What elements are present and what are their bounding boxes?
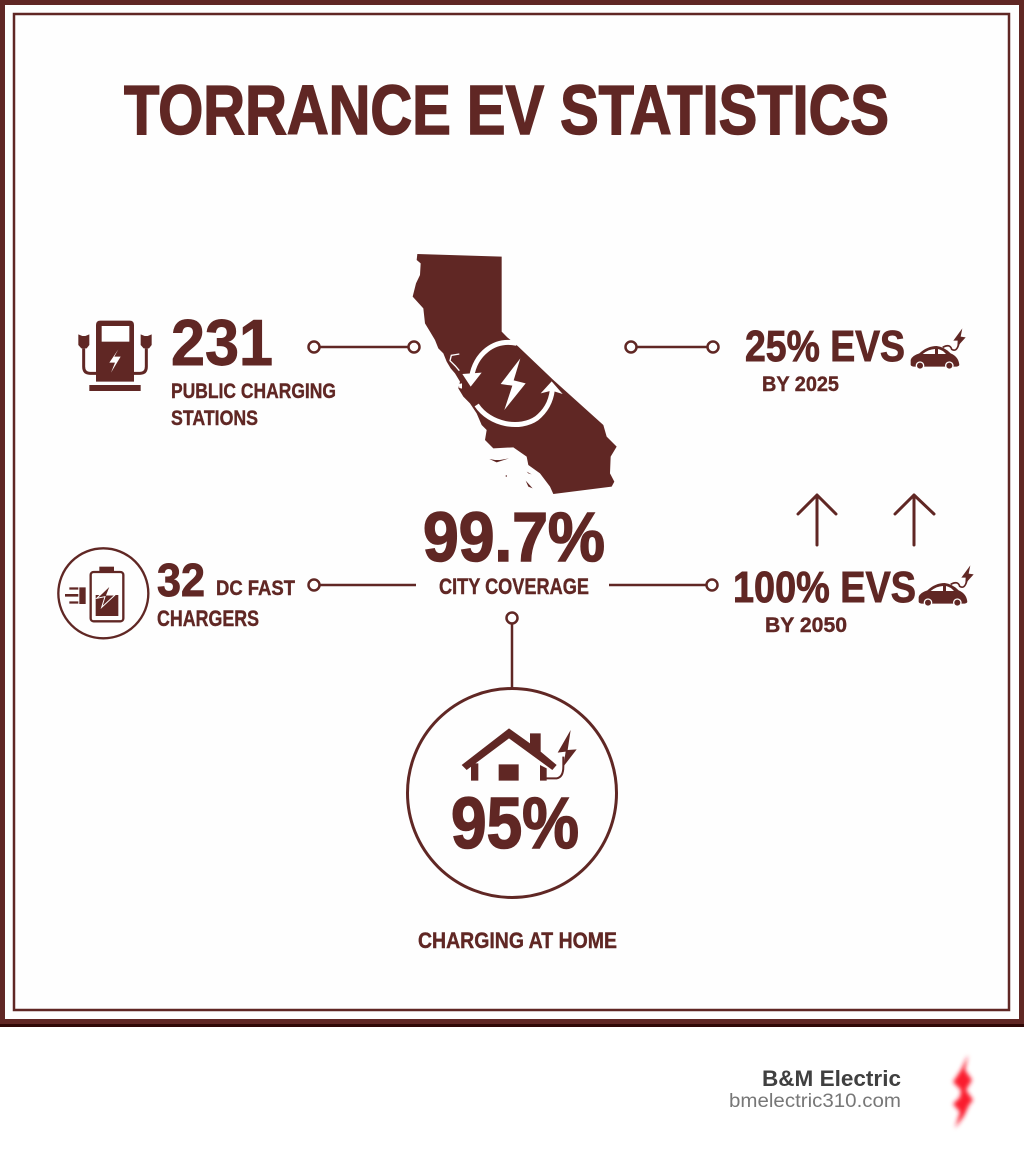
- stat: 25% EVs by 2025: [745, 322, 905, 396]
- icon: electric car 2025: [911, 328, 966, 369]
- stat: 100% EVs by 2050: BY 2050: [765, 614, 847, 637]
- stat: 25% EVs by 2025: BY 2025: [762, 373, 839, 396]
- arrow: left up arrow: [798, 495, 836, 545]
- stat: 100% EVs by 2050: 100% EVS: [733, 563, 916, 612]
- connector: public charging stations: [308, 342, 420, 352]
- stat: 32 DC fast chargers: [157, 554, 295, 631]
- connector: DC fast chargers: [308, 580, 416, 590]
- connector: 25% EVs: [626, 342, 718, 352]
- stat: 32 DC fast chargers: DC FAST: [216, 577, 295, 600]
- stat: 99.7% city coverage: CITY COVERAGE: [439, 574, 589, 599]
- stat: 231 public charging stations: [171, 306, 336, 430]
- stat: 231 public charging stations: PUBLIC CHARGING: [171, 380, 336, 403]
- icon: electric car 2050: [919, 565, 974, 606]
- home charging circle: [408, 688, 616, 898]
- stat: 100% EVs by 2050: [733, 563, 916, 637]
- stat: 231 public charging stations: 231: [171, 306, 273, 379]
- icon: fast-charging battery: [58, 548, 148, 638]
- stat: 25% EVs by 2025: 25% EVS: [745, 322, 905, 371]
- stat: 32 DC fast chargers: CHARGERS: [157, 606, 259, 631]
- connector: home charging: [506, 612, 518, 690]
- brand name: B&M Electric: [762, 1066, 901, 1091]
- label: charging at home: CHARGING AT HOME: [418, 928, 617, 953]
- title: TORRANCE EV STATISTICS: [124, 71, 889, 149]
- icon: house with charger: [462, 728, 577, 781]
- stat: 99.7% city coverage: 99.7%: [423, 498, 605, 576]
- California map with charging emblem: [413, 254, 617, 494]
- logo: red lightning bolt: [953, 1055, 973, 1128]
- stat: 32 DC fast chargers: 32: [157, 554, 205, 606]
- arrow: right up arrow: [895, 495, 934, 545]
- icon: charging station: [78, 321, 152, 391]
- brand url: bmelectric310.com: [729, 1090, 901, 1112]
- connector: 100% EVs: [609, 580, 718, 590]
- stat: 95%: 95%: [451, 784, 579, 864]
- stat: 231 public charging stations: STATIONS: [171, 407, 258, 430]
